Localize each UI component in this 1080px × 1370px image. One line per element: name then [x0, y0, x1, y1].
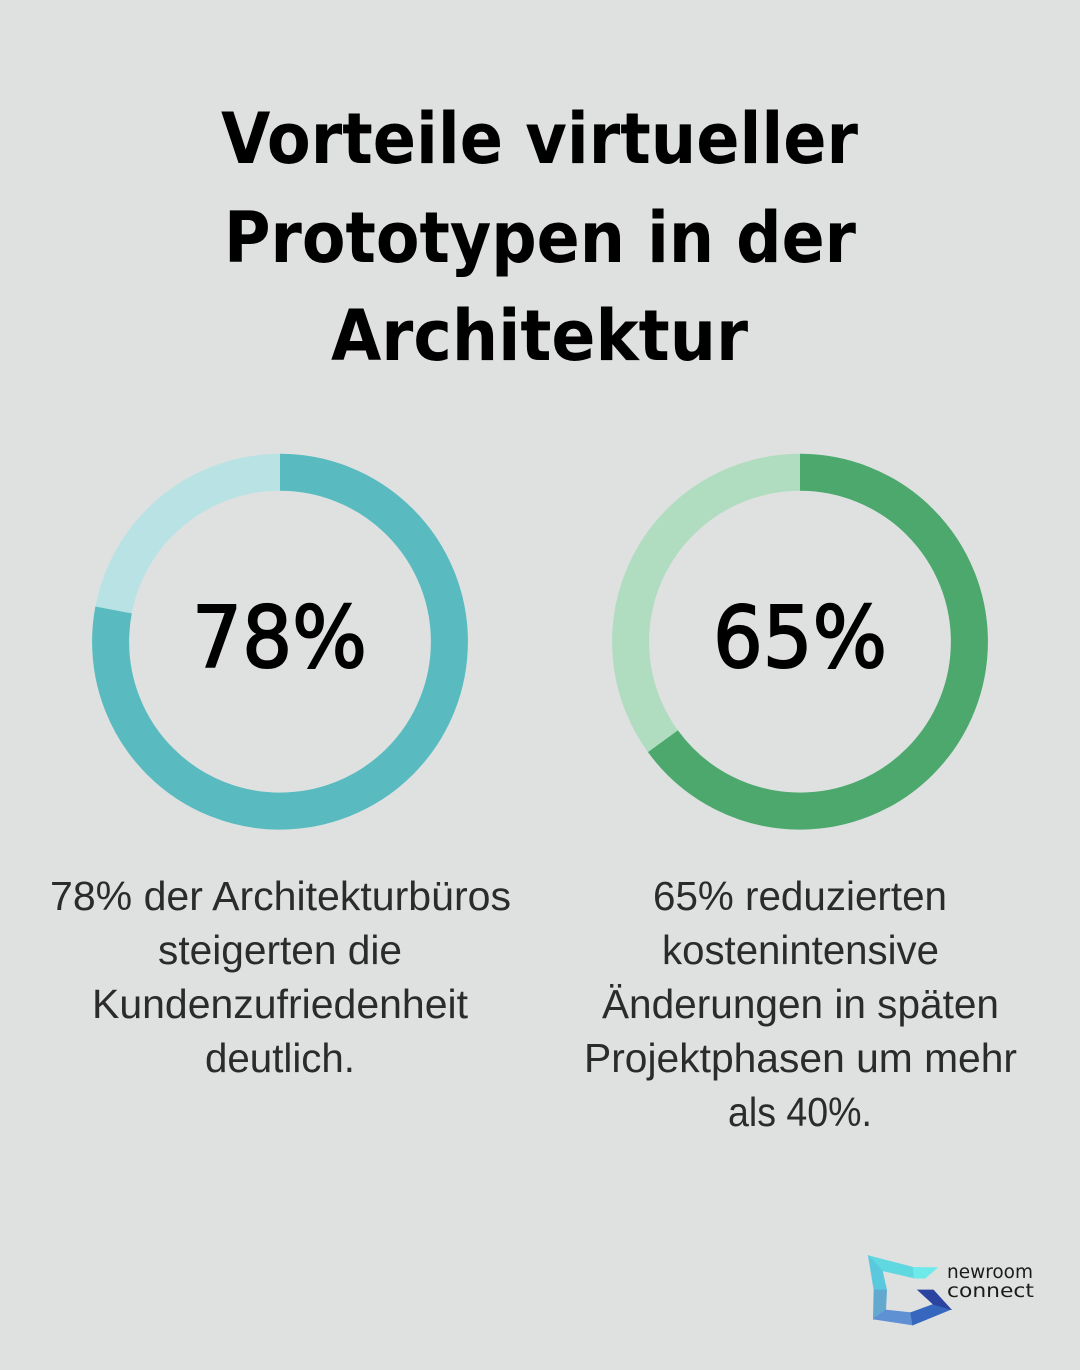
description: 78 percent: deutlich. [205, 1035, 355, 1081]
value: 65%: 65% [713, 589, 887, 688]
description: 65 percent: als 40%. [728, 1089, 872, 1135]
description: 78 percent: steigerten die [158, 927, 402, 973]
panel: 65 percent [584, 472, 1017, 1135]
logo: newroom connect [868, 1256, 1034, 1325]
panel: 78 percent [50, 472, 511, 1081]
description: 65 percent: Änderungen in späten [602, 981, 999, 1027]
wordmark: connect [947, 1280, 1034, 1302]
donut chart: 78 percent [111, 472, 449, 811]
description: 65 percent [584, 873, 1017, 1135]
donut chart: 65 percent [631, 472, 969, 811]
title: Architektur [331, 295, 748, 377]
wordmark: newroom [947, 1261, 1033, 1283]
title [221, 98, 858, 377]
description: 78 percent: Kundenzufriedenheit [92, 981, 469, 1027]
title: Vorteile virtueller [221, 98, 858, 180]
description: 78 percent: 78% der Architekturbüros [50, 873, 511, 919]
description: 65 percent: 65% reduzierten [653, 873, 947, 919]
title: Prototypen in der [224, 197, 856, 279]
description: 65 percent: Projektphasen um mehr [584, 1035, 1017, 1081]
description: 78 percent [50, 873, 511, 1081]
description: 65 percent: kostenintensive [662, 927, 939, 973]
icon: logo mark [868, 1256, 951, 1325]
wordmark [947, 1261, 1034, 1302]
value: 78%: 78% [192, 589, 367, 688]
